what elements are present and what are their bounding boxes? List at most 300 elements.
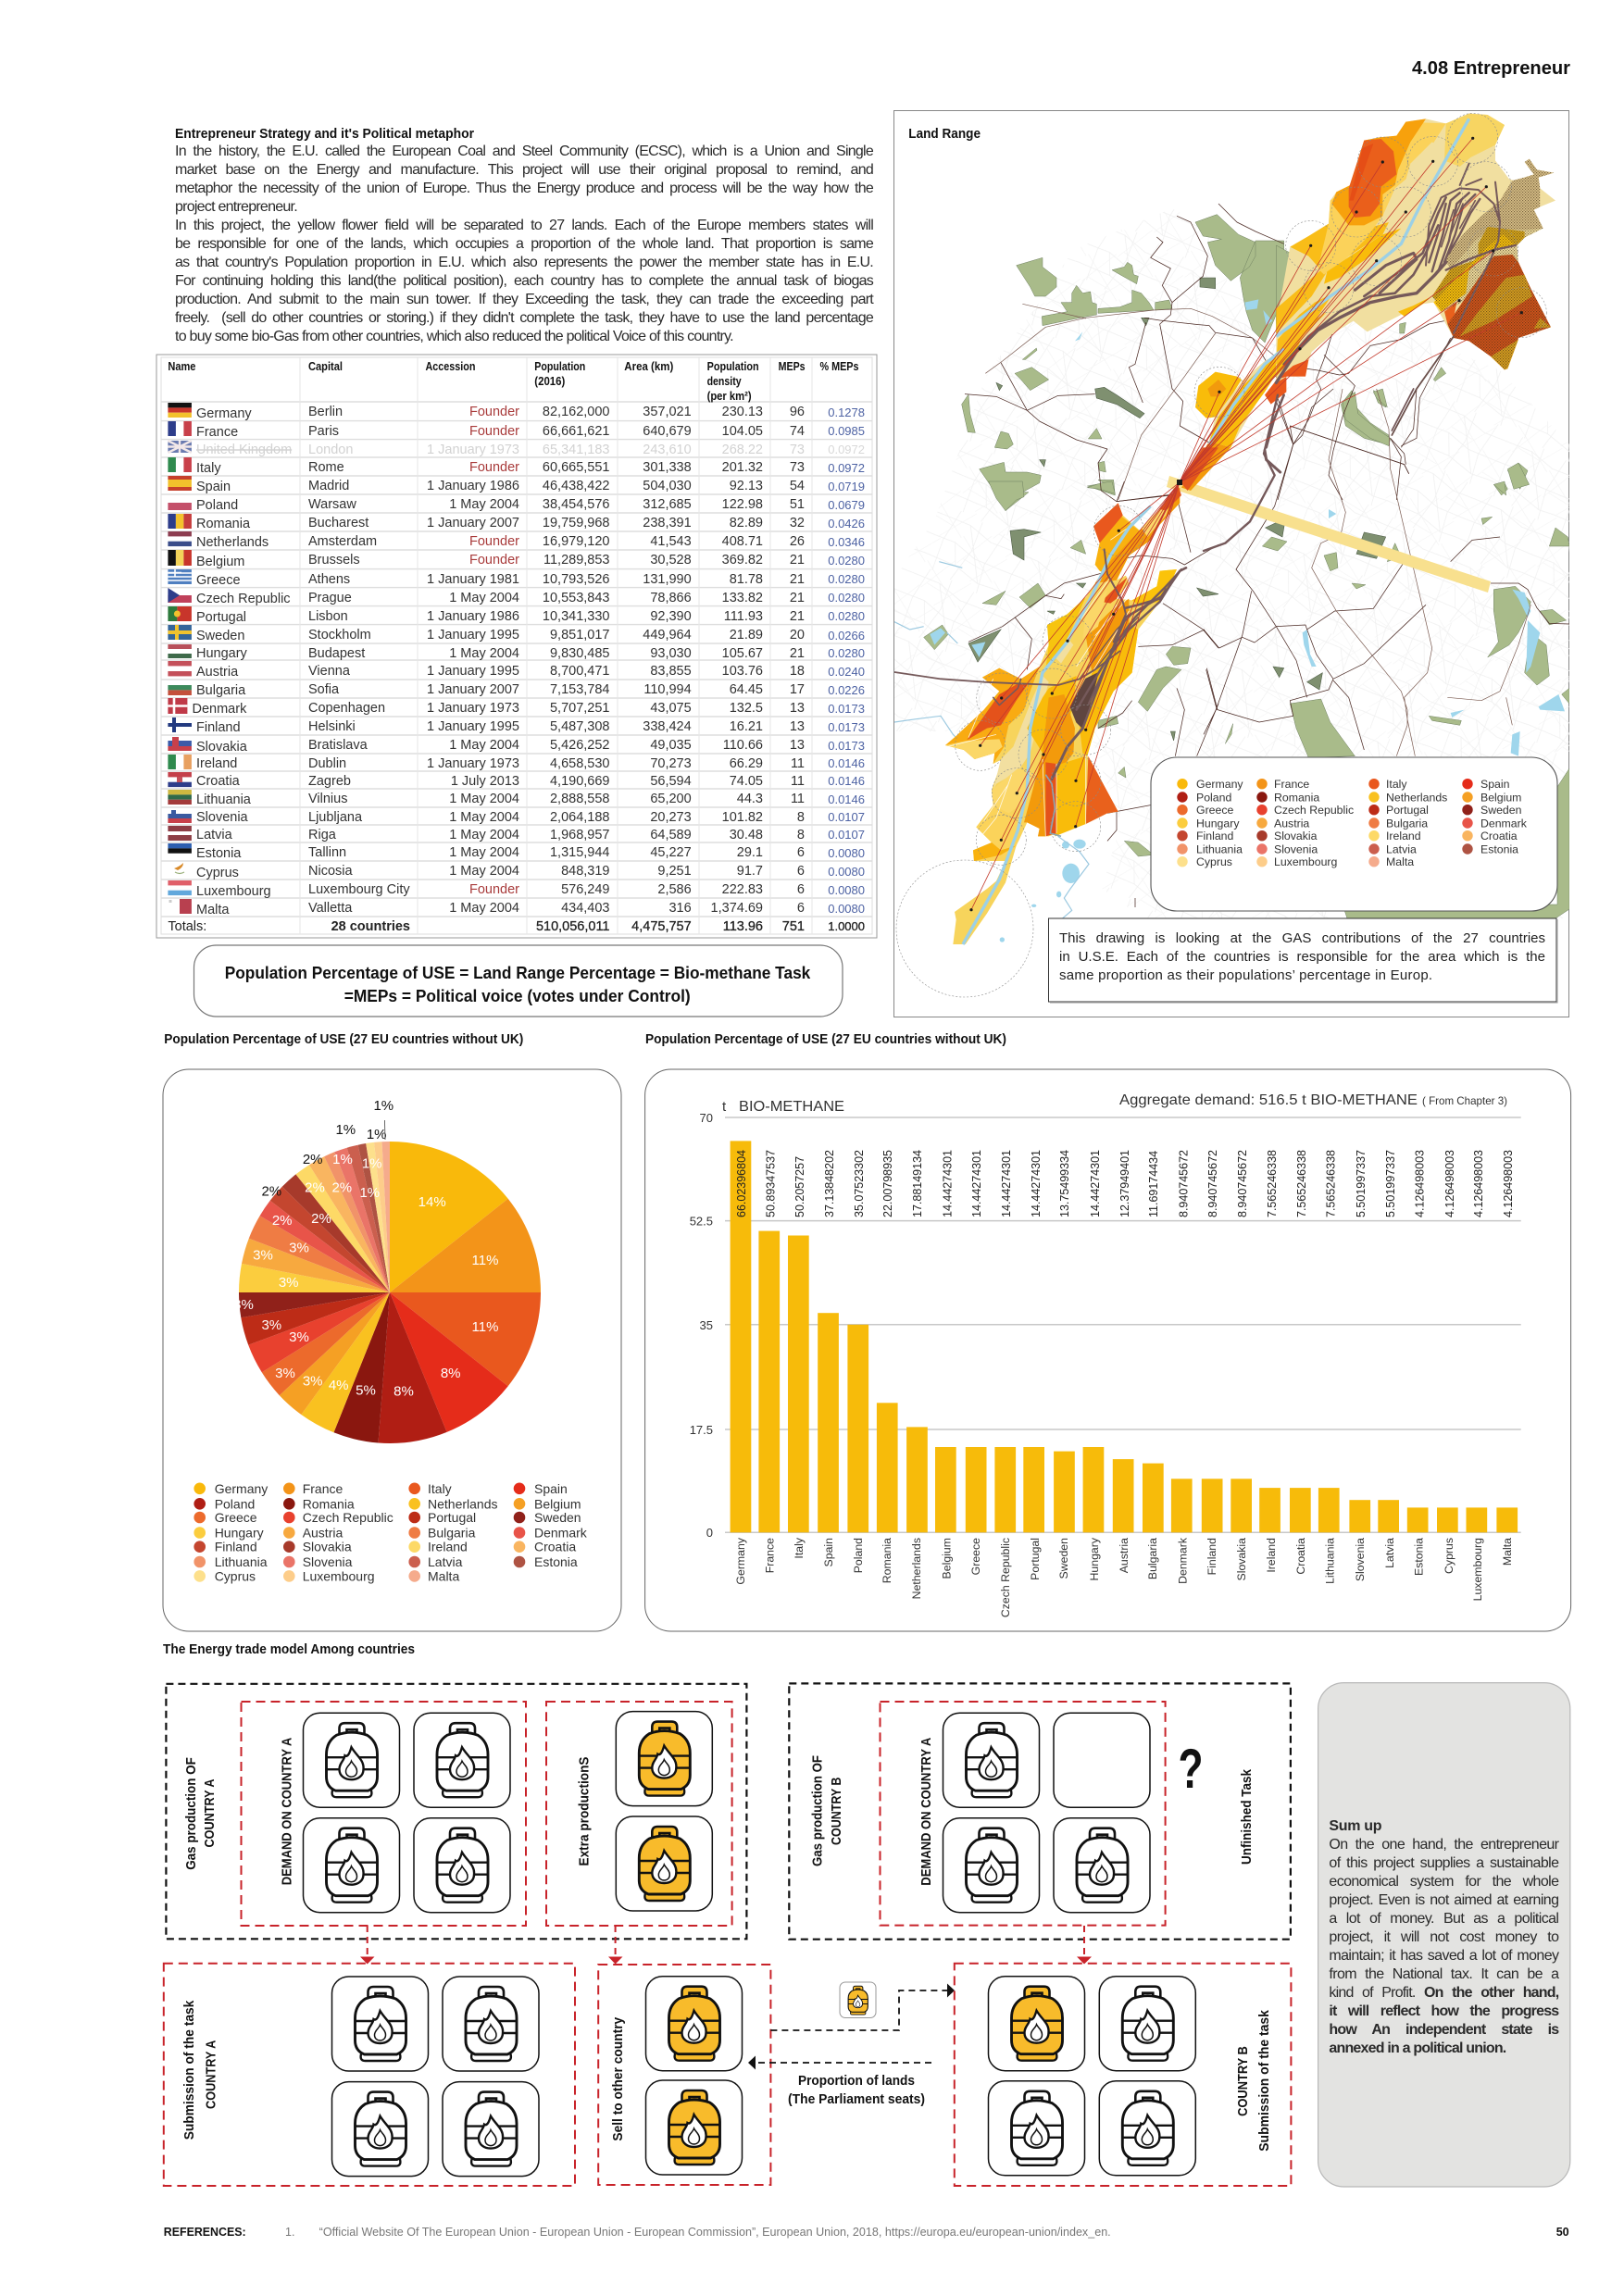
bar chart country labels: Croatia: [1294, 1538, 1307, 1575]
table density column: 1,374.69: [711, 901, 763, 916]
bar chart country labels: Netherlands: [910, 1538, 923, 1599]
text block: sum up: how An independent state is: [1329, 2022, 1558, 2038]
table density column: 82.89: [730, 516, 763, 530]
pie value labels: 2%: [305, 1180, 325, 1196]
bar chart value labels: 7.565246338: [1295, 1150, 1308, 1217]
callout: population equation: [194, 945, 843, 1017]
table area column: 238,391: [643, 516, 692, 530]
table population column: 65,341,183: [543, 443, 609, 457]
bar chart country labels: Portugal: [1029, 1538, 1042, 1580]
table area column: 49,035: [650, 738, 692, 753]
text block: sum up: Sum up: [1329, 1818, 1381, 1834]
heading: pie chart: Population Percentage of USE (27 EU countries without UK): [164, 1031, 523, 1047]
table population column: 9,851,017: [550, 628, 609, 643]
table percent MEPs column: 0.0280: [828, 646, 865, 660]
references: “Official Website Of The European Union - European Union - European Commission”, European Union, 2018, https://europa.eu/european-union/index_en.: [319, 2226, 1111, 2239]
table percent MEPs column: 0.0679: [828, 498, 865, 512]
table country names: Estonia: [196, 846, 242, 861]
table totals row: 4,475,757: [631, 919, 692, 934]
panel: sell to other country: [598, 1965, 770, 2185]
pie value labels: 3%: [233, 1297, 254, 1313]
table accession dates: 1 July 2013: [451, 774, 519, 789]
table density column: 103.76: [722, 664, 763, 679]
panel: submission of country B: COUNTRY B: [1236, 2046, 1251, 2116]
table population column: 10,553,843: [543, 591, 609, 605]
table density column: 408.71: [722, 534, 763, 549]
question mark: ?: [1178, 1738, 1204, 1800]
table population column: 4,658,530: [550, 756, 609, 771]
map legend: Malta: [1386, 855, 1414, 868]
table population column: 60,665,551: [543, 460, 609, 475]
table percent MEPs column: 0.0280: [828, 554, 865, 568]
table area column: 70,273: [650, 756, 692, 771]
map legend: Croatia: [1480, 830, 1518, 842]
pie value labels: 3%: [275, 1366, 295, 1381]
pie value labels: 3%: [261, 1317, 281, 1333]
table accession dates: 1 January 1981: [427, 572, 519, 587]
table density column: 104.05: [722, 424, 763, 439]
text block: strategy paragraphs: to buy some bio-Gas from other countries, which also reduced the political Voice of this country.: [175, 329, 733, 344]
table capitals: [308, 405, 410, 916]
table flags: [168, 403, 192, 914]
table capitals: Berlin: [308, 405, 343, 419]
label: proportion of lands: Proportion of lands: [798, 2073, 915, 2089]
table totals row: [168, 919, 865, 934]
panel: submission of country A: COUNTRY A: [204, 2040, 219, 2109]
table area column: 45,227: [650, 845, 692, 860]
panel: member states table: [156, 355, 877, 938]
arrow: gas sold to country B: [770, 1983, 955, 2030]
pie value labels: 11%: [472, 1319, 498, 1335]
page title: 4.08 Entrepreneur: [1412, 58, 1570, 79]
table accession dates: Founder: [469, 534, 519, 549]
map legend: Denmark: [1480, 817, 1528, 830]
table country names: Romania: [196, 517, 251, 531]
text block: map caption: This drawing is looking at the GAS contributions of the 27 countries: [1059, 930, 1545, 946]
bar chart country labels: Romania: [881, 1538, 893, 1583]
table capitals: Rome: [308, 460, 344, 475]
bar chart country labels: [734, 1537, 1514, 1617]
text block: sum up: On the one hand, the entrepreneur: [1329, 1837, 1558, 1853]
pie legend: Bulgaria: [428, 1526, 476, 1541]
heading: strategy text: Entrepreneur Strategy and it's Political metaphor: [175, 126, 474, 142]
pie legend: Luxembourg: [303, 1568, 375, 1583]
table population column: 8,700,471: [550, 664, 609, 679]
panel: land range map: [894, 111, 1569, 1017]
table density column: 66.29: [730, 756, 763, 771]
table accession dates: 1 May 2004: [449, 497, 519, 512]
bar chart y axis: 17.5: [690, 1423, 713, 1437]
table country names: Germany: [196, 406, 252, 421]
table accession dates: Founder: [469, 553, 519, 568]
pie legend: Malta: [428, 1568, 459, 1583]
label: gas production A: Gas production OF: [184, 1757, 199, 1870]
label: proportion of lands: [788, 2073, 925, 2107]
table percent MEPs column: 0.0280: [828, 591, 865, 605]
text block: sum up: maintain; it has saved a lot of money: [1329, 1948, 1558, 1964]
references: 1.: [285, 2226, 294, 2239]
panel: pie chart: [163, 1069, 621, 1631]
map legend: Estonia: [1480, 842, 1518, 855]
table accession dates: Founder: [469, 882, 519, 897]
bar chart value labels: 5.501997337: [1384, 1150, 1397, 1217]
bar chart value labels: 4.126498003: [1502, 1150, 1515, 1217]
map legend: Slovenia: [1274, 842, 1318, 855]
text block: sum up: kind of Profit. On the other hand,: [1329, 1985, 1558, 2001]
bar chart country labels: France: [763, 1538, 776, 1573]
map: dark roads and rail: [965, 204, 1569, 907]
table accession dates: Founder: [469, 424, 519, 439]
table accession dates: 1 January 1995: [427, 719, 519, 734]
pie legend: Netherlands: [428, 1496, 498, 1511]
text block: strategy paragraphs: In the history, the E.U. called the European Coal and Steel Community (ECSC), which is a Union and Single: [175, 144, 873, 159]
bar chart value labels: 5.501997337: [1355, 1150, 1368, 1217]
table MEPs column: 13: [790, 719, 805, 734]
pie legend: Austria: [303, 1526, 343, 1541]
pie legend: Portugal: [428, 1510, 476, 1525]
bar chart country labels: Estonia: [1413, 1538, 1426, 1576]
table density column: 91.7: [737, 864, 763, 879]
bar chart value labels: 4.126498003: [1413, 1150, 1426, 1217]
table capitals: Ljubljana: [308, 810, 363, 825]
text block: map caption: same proportion as their populations’ percentage in Europ.: [1059, 967, 1432, 983]
pie legend: France: [303, 1481, 343, 1496]
callout: population equation: =MEPs = Political voice (votes under Control): [344, 987, 691, 1005]
icon: small gas cylinder trade token: [840, 1982, 876, 2018]
bar chart y axis: 35: [700, 1318, 713, 1332]
table density column: 64.45: [730, 682, 763, 697]
table density column: 201.32: [722, 460, 763, 475]
table capitals: Vilnius: [308, 792, 347, 806]
table accession dates: 1 January 2007: [427, 516, 519, 530]
arrow: extra to sell: [608, 1926, 622, 1965]
table density column: 111.93: [724, 609, 763, 624]
table accession dates: 1 May 2004: [449, 810, 519, 825]
table accession dates: 1 January 1973: [427, 756, 519, 771]
table capitals: Valletta: [308, 901, 353, 916]
text block: sum up: [1329, 1818, 1559, 2056]
table density column: 29.1: [737, 845, 763, 860]
table population column: 46,438,422: [543, 479, 609, 493]
map: brown rail bundles: [894, 164, 1516, 780]
table density column: 44.3: [737, 792, 763, 806]
table density column: 222.83: [722, 882, 763, 897]
table header: Name: [168, 359, 195, 373]
map legend: Slovakia: [1274, 830, 1318, 842]
table capitals: Athens: [308, 572, 350, 587]
pie legend: Italy: [428, 1481, 452, 1496]
table percent MEPs column: 0.0080: [828, 902, 865, 916]
table area column: 20,273: [650, 810, 692, 825]
table MEPs column: 73: [790, 460, 805, 475]
page number: 50: [1556, 2225, 1569, 2239]
table population column: 4,190,669: [550, 774, 609, 789]
bar chart country labels: Austria: [1118, 1538, 1131, 1573]
table capitals: London: [308, 443, 353, 457]
map legend: Lithuania: [1196, 842, 1243, 855]
table MEPs column: [790, 405, 805, 916]
table country names: Ireland: [196, 756, 237, 771]
table MEPs column: 11: [791, 792, 805, 806]
bar chart country labels: Italy: [793, 1537, 806, 1559]
pie value labels: 2%: [272, 1213, 293, 1229]
bar chart country labels: Slovenia: [1354, 1538, 1367, 1581]
pie value labels: 11%: [472, 1253, 498, 1268]
map: top energy zones: [1276, 114, 1555, 382]
table area column: 301,338: [643, 460, 692, 475]
pie value labels: 3%: [289, 1241, 309, 1256]
table density column: 105.67: [722, 646, 763, 661]
bar chart value labels: 14.44274301: [970, 1150, 983, 1217]
table MEPs column: 20: [790, 628, 805, 643]
table percent MEPs column: 0.0107: [828, 810, 865, 824]
table accession dates: 1 January 1986: [427, 609, 519, 624]
pie value labels: 3%: [253, 1247, 273, 1263]
pie legend: Germany: [215, 1481, 268, 1496]
table density column: 230.13: [722, 405, 763, 419]
table percent MEPs column: 0.1278: [828, 406, 865, 419]
table population column: 1,315,944: [550, 845, 609, 860]
bar chart country labels: Sweden: [1057, 1538, 1070, 1578]
pie value labels: 1%: [335, 1122, 356, 1138]
table percent MEPs column: 0.0173: [828, 720, 865, 734]
panel: gas production of country B: [789, 1683, 1291, 1940]
map legend: Austria: [1274, 817, 1309, 830]
table totals row: Totals:: [168, 919, 206, 934]
map legend: Latvia: [1386, 842, 1417, 855]
table country names: Sweden: [196, 629, 244, 643]
bar chart value labels: 8.940745672: [1206, 1150, 1219, 1217]
box: extra productions: [546, 1702, 732, 1926]
bar chart y axis: 70: [700, 1111, 713, 1125]
table totals row: 28 countries: [331, 919, 410, 934]
table country names: Denmark: [193, 702, 247, 717]
table percent MEPs column: 0.0146: [828, 792, 865, 806]
map legend: Italy: [1386, 778, 1407, 791]
table accession dates: 1 May 2004: [449, 828, 519, 842]
table density column: 30.48: [730, 828, 763, 842]
pie legend: Croatia: [534, 1540, 576, 1554]
table country names: Poland: [196, 498, 238, 513]
text block: strategy paragraphs: freely. (sell do other countries or storing.) if they didn't complete the task, they have to use the land percentage: [175, 310, 873, 326]
table percent MEPs column: 0.0985: [828, 424, 865, 438]
table area column: 41,543: [650, 534, 692, 549]
map legend: Luxembourg: [1274, 855, 1338, 868]
table density column: 133.82: [722, 591, 763, 605]
heading: energy trade model: The Energy trade model Among countries: [163, 1641, 415, 1657]
table MEPs column: 74: [790, 424, 805, 439]
map: water bodies: [930, 299, 1565, 942]
bar chart value labels: 14.44274301: [941, 1150, 954, 1217]
box: extra productions: Extra productionS: [578, 1756, 593, 1866]
table MEPs column: 54: [790, 479, 805, 493]
bar chart country labels: Belgium: [941, 1538, 954, 1578]
map legend: [1151, 757, 1557, 911]
table population column: 2,064,188: [550, 810, 609, 825]
bar chart value labels: [735, 1150, 1515, 1217]
table percent MEPs column: 0.0346: [828, 535, 865, 549]
table density column: 132.5: [730, 701, 763, 716]
table country names: Italy: [196, 461, 221, 476]
map legend: Spain: [1480, 778, 1510, 791]
bar chart value labels: 11.69174434: [1147, 1151, 1160, 1217]
bar chart country labels: Malta: [1501, 1538, 1514, 1566]
pie legend: Finland: [215, 1540, 257, 1554]
map legend: Greece: [1196, 804, 1233, 817]
map legend: Finland: [1196, 830, 1233, 842]
table percent MEPs column: 0.0280: [828, 609, 865, 623]
table capitals: Amsterdam: [308, 534, 377, 549]
pie value labels: 1%: [362, 1156, 382, 1172]
table country names: Belgium: [196, 555, 244, 569]
panel: submission of country A: [164, 1964, 575, 2186]
table capitals: Stockholm: [308, 628, 371, 643]
table accession dates: 1 May 2004: [449, 864, 519, 879]
pie legend: Latvia: [428, 1554, 463, 1569]
table population column: 11,289,853: [543, 553, 609, 568]
table country names: Netherlands: [196, 535, 269, 550]
pie value labels: 8%: [394, 1383, 414, 1400]
table totals row: 510,056,011: [536, 919, 609, 934]
map legend: Sweden: [1480, 804, 1522, 817]
bar chart y axis: 52.5: [690, 1215, 713, 1228]
pie value labels: [233, 1098, 498, 1400]
table percent MEPs column: 0.0972: [828, 461, 865, 475]
table totals row: 113.96: [723, 919, 763, 934]
table country names: Hungary: [196, 646, 248, 661]
arrow: proportion of lands returned: [748, 2055, 931, 2070]
table country names: Czech Republic: [196, 592, 291, 606]
panel: sum up background: [1318, 1683, 1570, 2187]
table MEPs column: 21: [790, 553, 805, 568]
table area column: 93,030: [650, 646, 692, 661]
pie value labels: 2%: [311, 1211, 331, 1227]
label: gas production A: [184, 1757, 218, 1870]
table percent MEPs column: 0.0226: [828, 683, 865, 697]
bar chart country labels: Denmark: [1176, 1537, 1189, 1584]
references: REFERENCES:: [164, 2226, 246, 2239]
table percent MEPs column: 0.0107: [828, 828, 865, 842]
pie legend: Lithuania: [215, 1554, 268, 1569]
box: demand on country A: [241, 1702, 526, 1926]
table density column: 92.13: [730, 479, 763, 493]
table area column: 30,528: [650, 553, 692, 568]
text block: sum up: a lot of money. But as a political: [1329, 1911, 1558, 1927]
bar chart value labels: 66.02396804: [735, 1150, 748, 1217]
pie value labels: 2%: [261, 1183, 281, 1200]
bar chart titles: ( From Chapter 3): [1422, 1094, 1507, 1107]
pie legend: Czech Republic: [303, 1510, 394, 1525]
bar chart value labels: 7.565246338: [1266, 1150, 1279, 1217]
table capitals: Budapest: [308, 646, 365, 661]
table MEPs column: 17: [790, 682, 805, 697]
table population column: [543, 405, 609, 916]
table capitals: Sofia: [308, 682, 340, 697]
map: street network: [894, 208, 1569, 918]
table accession dates: 1 May 2004: [449, 738, 519, 753]
bar chart country labels: Latvia: [1383, 1538, 1396, 1568]
bar chart value labels: 4.126498003: [1472, 1150, 1485, 1217]
table country names: Malta: [196, 903, 230, 917]
table area column: 357,021: [643, 405, 692, 419]
table MEPs column: 6: [797, 845, 805, 860]
map: thin brown rail lines: [985, 304, 1530, 756]
text block: sum up: project, it will not cost money to: [1329, 1929, 1558, 1945]
bar chart bars: [731, 1141, 1518, 1532]
map: influence circles: [896, 113, 1546, 997]
map legend: Ireland: [1386, 830, 1421, 842]
table country names: France: [196, 425, 238, 440]
table percent MEPs column: 0.0146: [828, 756, 865, 770]
table header: density: [707, 374, 742, 388]
pie value labels: 14%: [418, 1194, 446, 1210]
label: gas production B: Gas production OF: [811, 1755, 826, 1866]
bar chart value labels: 50.2057257: [793, 1156, 806, 1217]
map legend: France: [1274, 778, 1309, 791]
bar chart value labels: 35.07523302: [853, 1150, 866, 1217]
table density column: 81.78: [730, 572, 763, 587]
table accession dates: Founder: [469, 405, 519, 419]
table percent MEPs column: 0.0280: [828, 572, 865, 586]
pie legend: [194, 1481, 588, 1583]
map legend: Bulgaria: [1386, 817, 1428, 830]
table area column: 2,586: [657, 882, 692, 897]
table capitals: Luxembourg City: [308, 882, 410, 897]
table capitals: Dublin: [308, 756, 346, 771]
table density column: 110.66: [723, 738, 763, 753]
map: river through zones: [963, 119, 1469, 944]
map: blue rivers: [894, 562, 1089, 919]
table accession dates: 1 May 2004: [449, 591, 519, 605]
table country names: Portugal: [196, 610, 246, 625]
table density column: [711, 405, 763, 916]
table MEPs column: 32: [790, 516, 805, 530]
text block: strategy paragraphs: In this project, the yellow flower field will be separated to 27 lands. Each of the Europe members states will: [175, 218, 873, 233]
bar chart value labels: 22.00798935: [881, 1150, 894, 1217]
pie value labels: 3%: [303, 1374, 323, 1390]
pie legend: Spain: [534, 1481, 568, 1496]
table population column: 5,707,251: [550, 701, 609, 716]
text block: strategy paragraphs: production. And submit to the main sun tower. If they Exceeding the task, they can trade the exceeding part: [175, 292, 873, 307]
table country names: Greece: [196, 573, 241, 588]
label: gas production A: COUNTRY A: [203, 1778, 218, 1848]
pie legend: Sweden: [534, 1510, 581, 1525]
pie legend: Romania: [303, 1496, 355, 1511]
table header: % MEPs: [820, 359, 859, 373]
bar chart titles: BIO-METHANE: [739, 1099, 844, 1115]
text block: sum up: from the National tax. It can be a: [1329, 1966, 1558, 1982]
bar chart gridlines: [725, 1117, 1521, 1532]
pie value labels: 1%: [359, 1185, 380, 1201]
table MEPs column: 51: [790, 497, 805, 512]
bar chart value labels: 37.13848202: [823, 1150, 836, 1217]
table population column: 66,661,621: [543, 424, 609, 439]
table area column: 78,866: [650, 591, 692, 605]
panel: gas production of country A: [166, 1684, 746, 1939]
text block: sum up: annexed in a political union.: [1329, 2040, 1505, 2056]
bar chart country labels: Ireland: [1265, 1538, 1278, 1573]
table population column: 10,793,526: [543, 572, 609, 587]
table area column: 243,610: [643, 443, 692, 457]
table area column: 312,685: [643, 497, 692, 512]
bar chart country labels: Germany: [734, 1537, 747, 1585]
table MEPs column: 18: [790, 664, 805, 679]
table capitals: Bucharest: [308, 516, 369, 530]
table accession dates: 1 May 2004: [449, 646, 519, 661]
table country names: Slovenia: [196, 810, 249, 825]
pie legend: Slovakia: [303, 1540, 352, 1554]
table area column: 640,679: [643, 424, 692, 439]
